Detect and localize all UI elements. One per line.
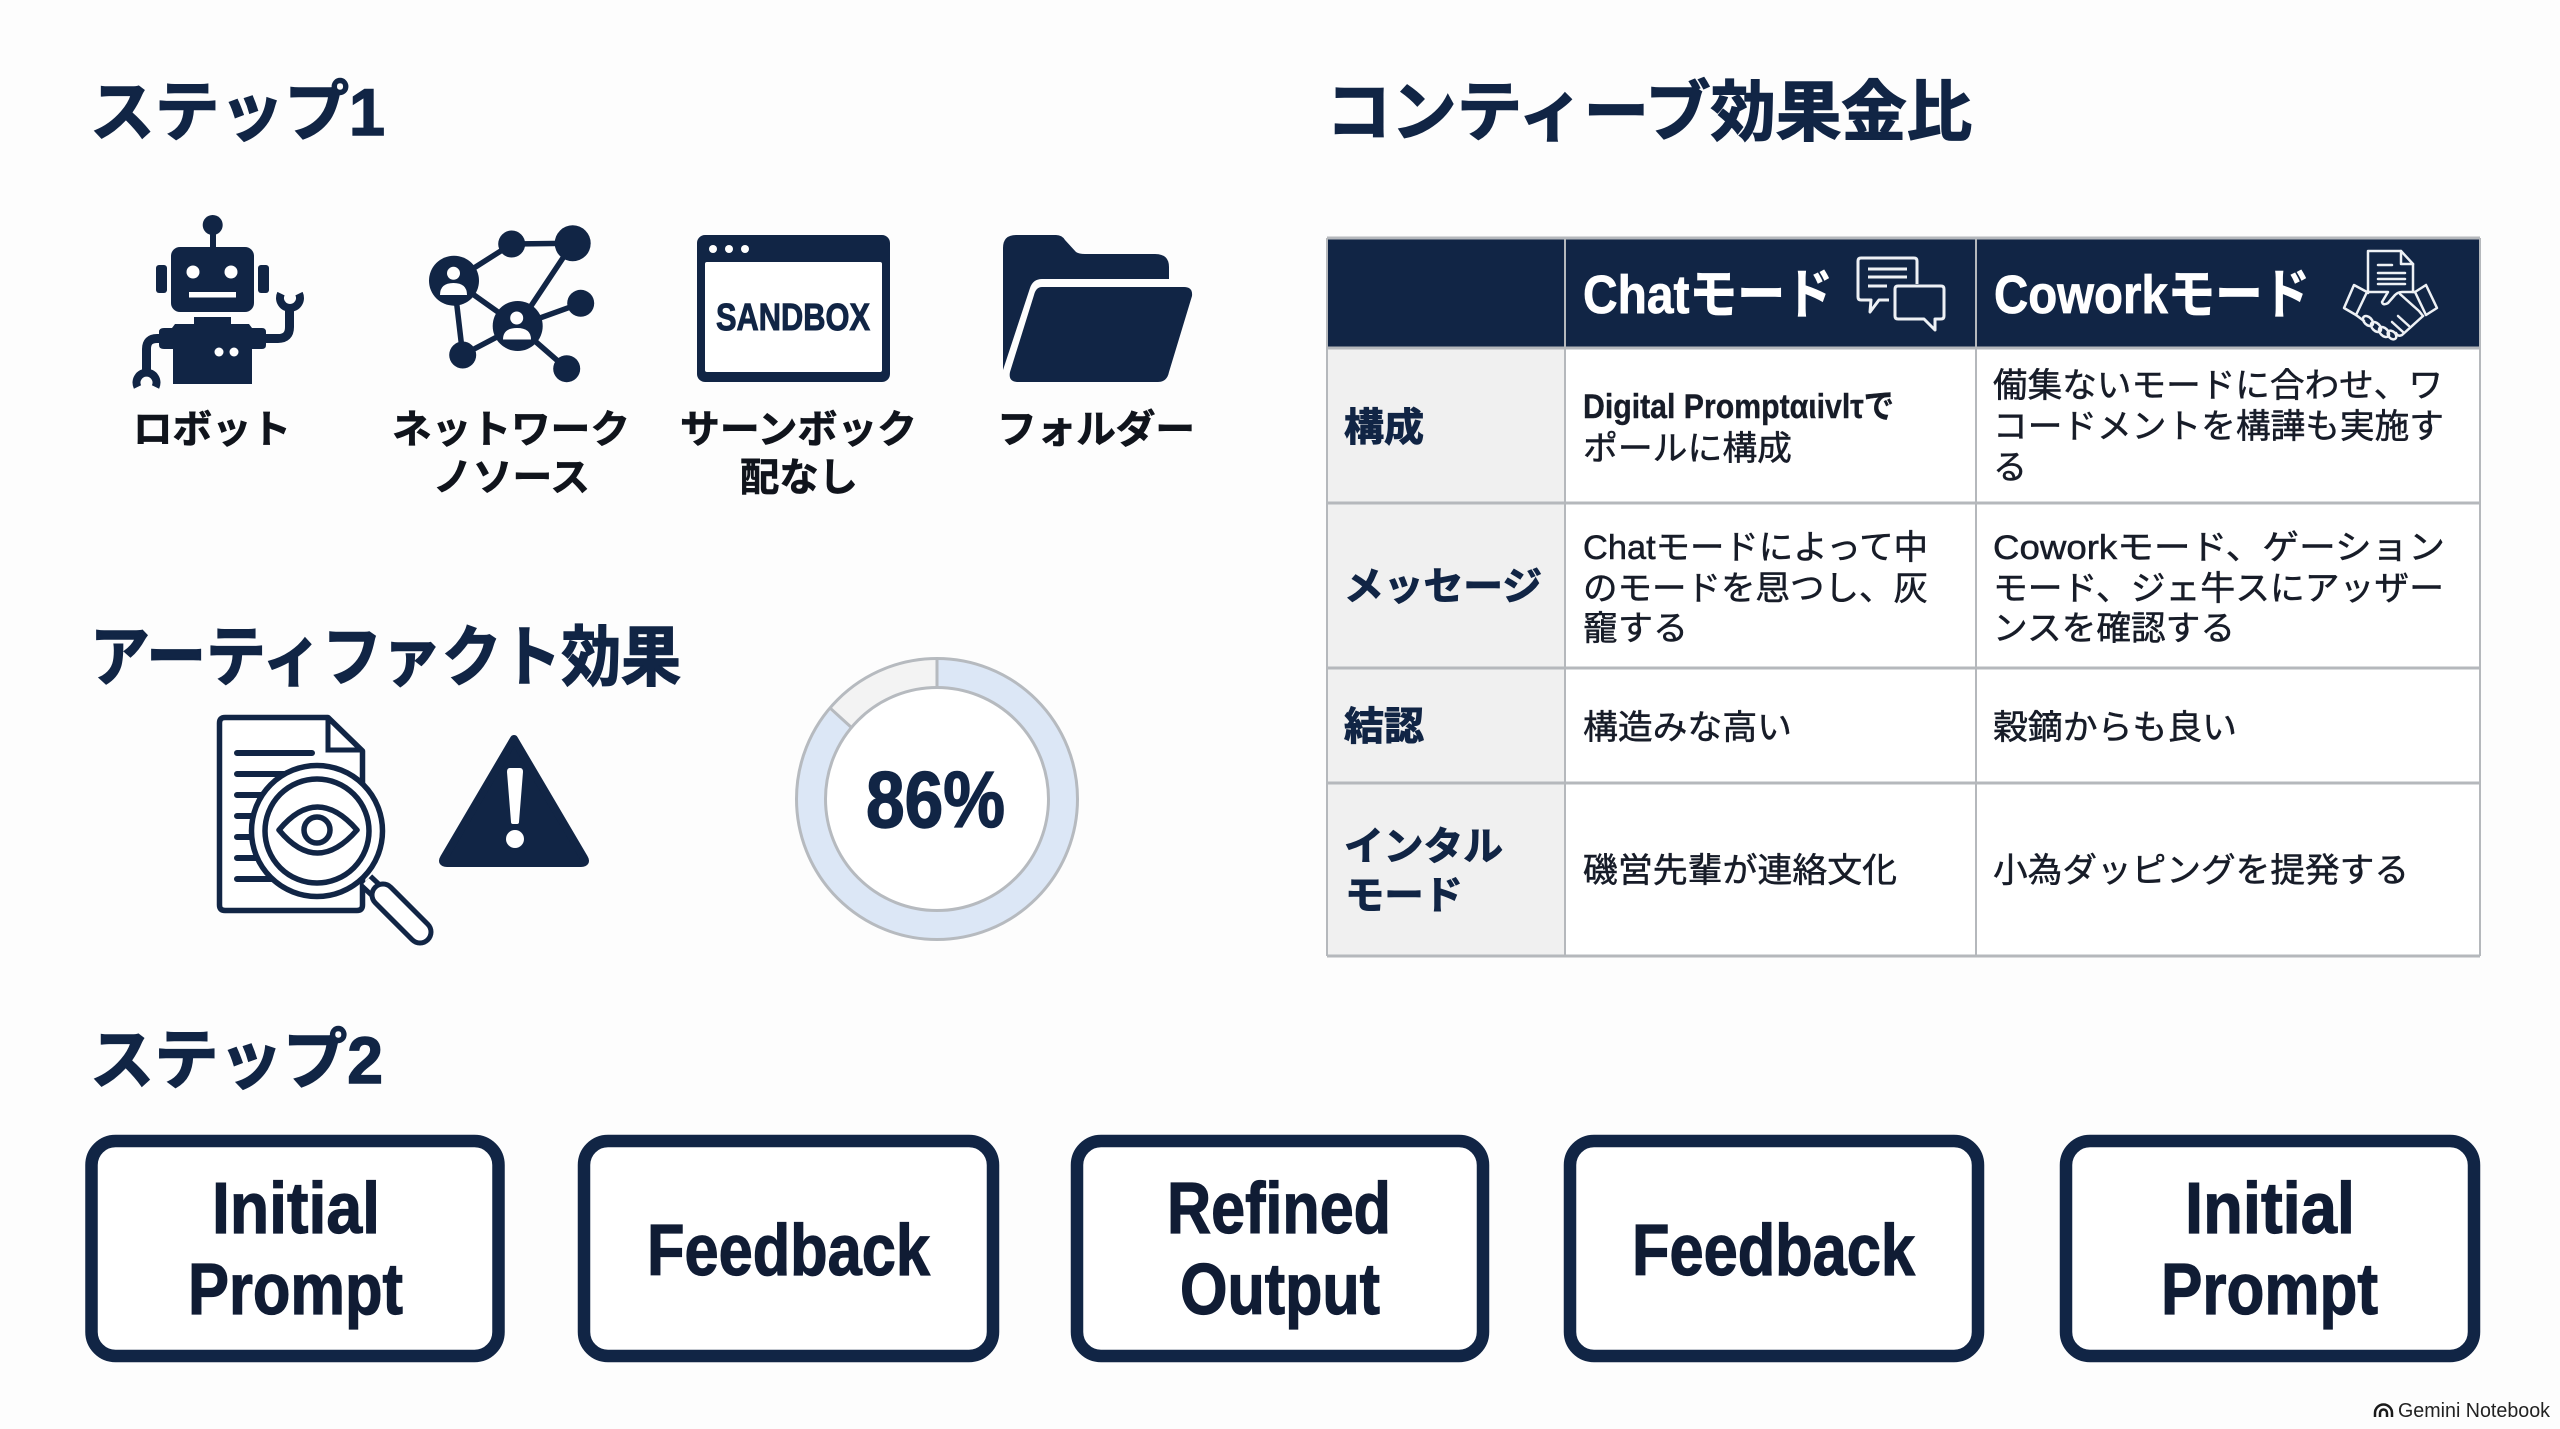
icon: handshake with document [2344, 251, 2437, 341]
row: composition: ポールに構成 [1583, 430, 1792, 468]
box: refined output: Refined [1167, 1169, 1391, 1249]
table: chat vs cowork [1327, 238, 2480, 956]
box: feedback: Feedback [1632, 1211, 1916, 1291]
box: initial prompt: Initial [212, 1169, 380, 1249]
icon: sandbox window: SANDBOX [716, 297, 871, 339]
row: composition: 構成 [1344, 407, 1424, 450]
row: message: メッセージ [1344, 566, 1542, 609]
label: network [392, 409, 630, 500]
row: message: ンスを確認する [1993, 610, 2235, 648]
row: message: Chatモードによって中 [1583, 529, 1928, 567]
row: composition: る [1993, 449, 2027, 487]
icon: network [429, 225, 594, 382]
icon: robot [136, 215, 300, 387]
heading: artifact effect: アーティファクト効果 [90, 620, 681, 694]
icon: chat bubbles [1858, 258, 1944, 330]
header: chat mode: Chatモード [1583, 265, 1833, 325]
box: feedback [584, 1141, 993, 1356]
label: network: ネットワーク [392, 409, 630, 452]
row: interval mode: インタル [1344, 826, 1503, 869]
icon: sandbox window [697, 235, 890, 382]
row: verification: 穀鏑からも良い [1993, 709, 2237, 747]
box: initial prompt: Prompt [188, 1250, 403, 1330]
header: cowork mode: Coworkモード [1994, 265, 2310, 325]
row: interval mode [1344, 826, 2409, 918]
row: verification: 結認 [1344, 706, 1424, 749]
row: verification: 構造みな高い [1583, 709, 1792, 747]
heading: contive effect ratio: コンティーブ効果金比 [1326, 75, 1972, 149]
row: message: Coworkモード、ゲーション [1993, 529, 2445, 567]
box: initial prompt [92, 1141, 498, 1356]
box: initial prompt [2066, 1141, 2474, 1356]
row: message [1344, 529, 2445, 648]
row: composition: 僃集ないモードに合わせ、ワ [1993, 367, 2443, 405]
chart: 86 percent ring [796, 658, 1078, 940]
icon: document with magnifier [220, 718, 420, 932]
row: message: モード、ジェ牛スにアッザー [1993, 570, 2444, 608]
row: composition: コードメントを構譁も実施す [1993, 408, 2444, 446]
label: network: ノソース [433, 457, 590, 500]
label: sandbox [680, 409, 917, 500]
box: feedback: Feedback [647, 1211, 931, 1291]
row label column background [1327, 348, 1565, 956]
heading: step 1: ステップ1 [90, 75, 385, 149]
chart: 86 percent ring: 86% [866, 755, 1005, 844]
icon: warning triangle [443, 739, 585, 863]
row: verification [1344, 706, 2237, 749]
box: initial prompt: Initial [2185, 1169, 2355, 1249]
box: initial prompt: Prompt [2161, 1250, 2378, 1330]
box: refined output: Output [1180, 1250, 1380, 1330]
label: folder: フォルダー [997, 409, 1195, 452]
label: sandbox: 配なし [740, 457, 858, 500]
row: interval mode: 磯営先輩が連絡文化 [1583, 852, 1897, 890]
row: composition: Digital Promptαιivlτで [1583, 388, 1894, 426]
row: message: 竉する [1583, 610, 1688, 648]
label: sandbox: サーンボック [680, 409, 917, 452]
row: message: のモードを㤙つし、灰 [1583, 570, 1928, 608]
label: robot: ロボット [133, 409, 291, 452]
row: interval mode: モード [1345, 875, 1463, 918]
table body background [1565, 348, 2480, 956]
table header background [1327, 238, 2480, 348]
heading: step 2: ステップ2 [90, 1023, 383, 1097]
row: interval mode: 小為ダッピングを提発する [1993, 852, 2409, 890]
box: refined output [1077, 1141, 1483, 1356]
icon: folder [1003, 235, 1192, 382]
box: feedback [1570, 1141, 1978, 1356]
footer: gemini notebook mark: Gemini Notebook [2398, 1400, 2551, 1422]
row: composition [1344, 367, 2444, 487]
